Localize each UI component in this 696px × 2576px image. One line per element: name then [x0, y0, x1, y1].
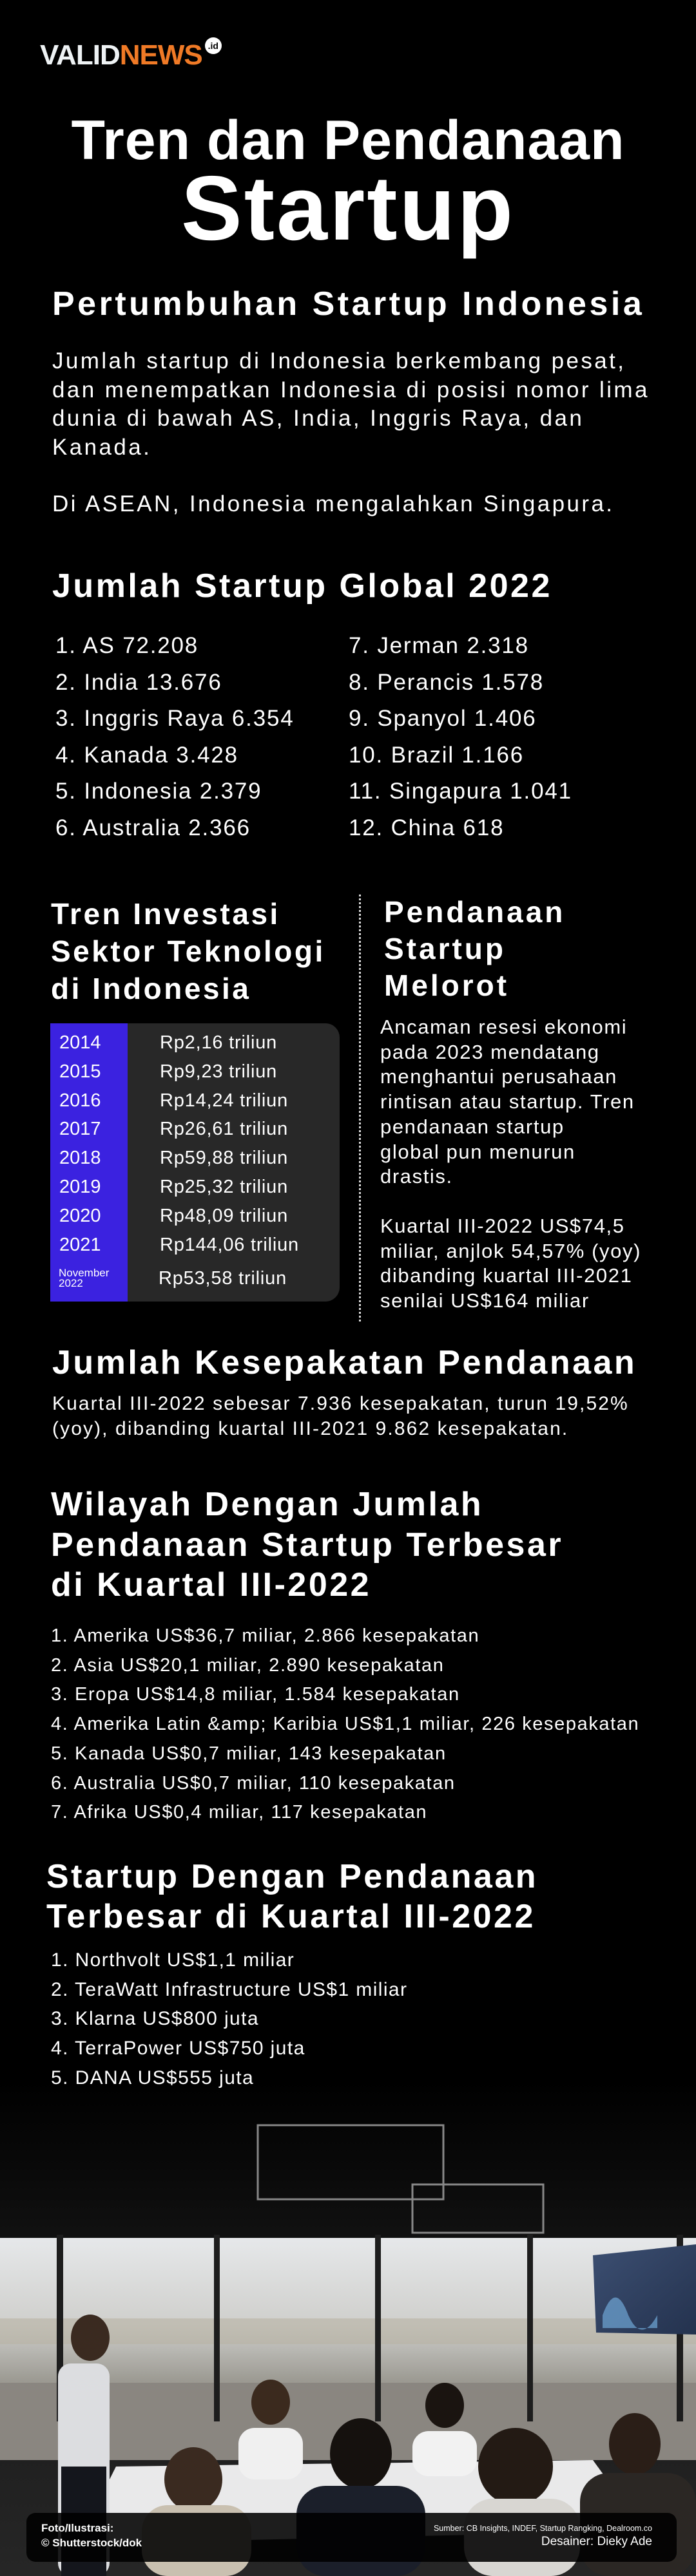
- table: investasi: 2015: [59, 1061, 101, 1082]
- text: kuartal figures: Kuartal III-2022 US$74,5: [380, 1215, 625, 1237]
- list: startup global: [55, 633, 572, 840]
- list: startup global: 10. Brazil 1.166: [349, 743, 524, 768]
- heading: Tren Investasi: [51, 897, 325, 1005]
- photo credit: [41, 2522, 142, 2549]
- values column: Rp25,32 triliun: [160, 1177, 288, 1197]
- list: startup global: 4. Kanada 3.428: [55, 743, 238, 768]
- text: pertumbuhan paragraph: dunia di bawah AS, India, Inggris Raya, dan: [52, 406, 584, 431]
- list: startup global: 1. AS 72.208: [55, 633, 198, 658]
- heading: Jumlah Startup Global 2022: Jumlah Startup Global 2022: [52, 567, 552, 605]
- title: Tren dan Pendanaan: [71, 109, 625, 171]
- heading: Startup Dengan Pendanaan: Startup Dengan Pendanaan: [46, 1858, 538, 1895]
- heading: Pertumbuhan Startup Indonesia: Pertumbuhan Startup Indonesia: [52, 285, 644, 323]
- text: pertumbuhan paragraph: dan menempatkan Indonesia di posisi nomor lima: [52, 377, 650, 402]
- title: Startup: [181, 157, 515, 260]
- title: [71, 109, 625, 260]
- text: kesepakatan: [52, 1393, 629, 1439]
- text: kuartal figures: miliar, anjlok 54,57% (yoy): [380, 1240, 641, 1262]
- source and designer: Sumber: CB Insights, INDEF, Startup Rangking, Dealroom.co: [434, 2524, 652, 2533]
- heading: Wilayah: di Kuartal III-2022: [51, 1566, 371, 1604]
- list: startup global: 3. Inggris Raya 6.354: [55, 706, 295, 731]
- text: melorot paragraph: Ancaman resesi ekonomi: [380, 1016, 627, 1038]
- values column: Rp9,23 triliun: [160, 1061, 277, 1082]
- heading: Pendanaan Startup Melorot: Startup: [384, 932, 506, 965]
- tv: [593, 2244, 696, 2334]
- list: startup global: 7. Jerman 2.318: [349, 633, 529, 658]
- list: startup global: 11. Singapura 1.041: [349, 779, 572, 804]
- values column: Rp14,24 triliun: [160, 1090, 288, 1111]
- list: startup global: 8. Perancis 1.578: [349, 670, 544, 695]
- text: ASEAN: Di ASEAN, Indonesia mengalahkan Singapura.: [52, 491, 614, 516]
- table: investasi: 2017: [59, 1119, 101, 1139]
- list: wilayah: 4. Amerika Latin &amp; Karibia US$1,1 miliar, 226 kesepakatan: [51, 1714, 639, 1734]
- table: investasi: 2016: [59, 1090, 101, 1111]
- list: wilayah: 3. Eropa US$14,8 miliar, 1.584 kesepakatan: [51, 1684, 460, 1705]
- heading: Wilayah: Pendanaan Startup Terbesar: [51, 1526, 563, 1564]
- text: kuartal figures: dibanding kuartal III-2021: [380, 1264, 632, 1287]
- text: melorot paragraph: rintisan atau startup. Tren: [380, 1090, 635, 1113]
- list: startup global: 2. India 13.676: [55, 670, 222, 695]
- list: wilayah: [51, 1625, 639, 1823]
- heading: Tren Investasi: Sektor Teknologi: [51, 934, 325, 968]
- values column: Rp144,06 triliun: [160, 1235, 299, 1255]
- logo: VALIDNEWS: [40, 39, 202, 71]
- heading: Startup Dengan Pendanaan: Terbesar di Kuartal III-2022: [46, 1898, 536, 1935]
- list: startup terbesar: 2. TeraWatt Infrastructure US$1 miliar: [51, 1979, 407, 2000]
- list: wilayah: 7. Afrika US$0,4 miliar, 117 kesepakatan: [51, 1802, 427, 1823]
- text: pertumbuhan paragraph: [52, 348, 650, 460]
- text: melorot paragraph: drastis.: [380, 1165, 453, 1188]
- heading: Pendanaan Startup Melorot: Pendanaan: [384, 895, 565, 929]
- text: melorot paragraph: [380, 1016, 635, 1188]
- text: melorot paragraph: global pun menurun: [380, 1141, 575, 1163]
- text: melorot paragraph: pada 2023 mendatang: [380, 1041, 600, 1063]
- people: [58, 2315, 696, 2576]
- photo: meeting room: [0, 2124, 696, 2576]
- list: wilayah: 2. Asia US$20,1 miliar, 2.890 kesepakatan: [51, 1655, 445, 1676]
- table: investasi: Rp53,58 triliun: [159, 1268, 287, 1289]
- year column: [50, 1023, 128, 1302]
- text: pertumbuhan paragraph: Kanada.: [52, 434, 151, 460]
- photo credit: Foto/Ilustrasi:: [41, 2522, 113, 2534]
- table: investasi: 2018: [59, 1148, 101, 1168]
- text: melorot paragraph: menghantui perusahaan: [380, 1065, 617, 1088]
- list: startup terbesar: 3. Klarna US$800 juta: [51, 2008, 259, 2029]
- list: startup terbesar: 5. DANA US$555 juta: [51, 2067, 254, 2088]
- heading: Wilayah: Wilayah Dengan Jumlah: [51, 1486, 483, 1523]
- values column: [160, 1032, 299, 1255]
- list: startup terbesar: [51, 1949, 407, 2088]
- values column: Rp48,09 triliun: [160, 1206, 288, 1226]
- table: investasi: 2020: [59, 1206, 101, 1226]
- heading: Startup Dengan Pendanaan: [46, 1858, 538, 1935]
- values column: Rp2,16 triliun: [160, 1032, 277, 1053]
- window band: [0, 2238, 696, 2383]
- table: [77, 2460, 644, 2544]
- table: investasi: [50, 1023, 340, 1302]
- table: investasi: 2022: [59, 1277, 83, 1289]
- lamps: [258, 2125, 543, 2233]
- table: investasi: November: [59, 1267, 109, 1279]
- list: wilayah: 6. Australia US$0,7 miliar, 110 kesepakatan: [51, 1773, 456, 1794]
- photo credit: © Shutterstock/dok: [41, 2537, 142, 2549]
- text: kesepakatan: (yoy), dibanding kuartal III-2021 9.862 kesepakatan.: [52, 1418, 568, 1439]
- heading: Wilayah: [51, 1486, 563, 1604]
- list: wilayah: 1. Amerika US$36,7 miliar, 2.866 kesepakatan: [51, 1625, 479, 1646]
- heading: Tren Investasi: Tren Investasi: [51, 897, 280, 931]
- list: startup terbesar: 1. Northvolt US$1,1 miliar: [51, 1949, 295, 1971]
- values column: Rp26,61 triliun: [160, 1119, 288, 1139]
- source and designer: [434, 2524, 652, 2548]
- table: investasi: 2014: [59, 1032, 101, 1053]
- list: startup global: 6. Australia 2.366: [55, 815, 251, 840]
- footer: credits: [26, 2513, 677, 2562]
- source and designer: Desainer: Dieky Ade: [541, 2535, 652, 2548]
- list: startup global: 12. China 618: [349, 815, 504, 840]
- heading: Pendanaan Startup Melorot: Melorot: [384, 969, 509, 1002]
- text: kesepakatan: Kuartal III-2022 sebesar 7.936 kesepakatan, turun 19,52%: [52, 1393, 629, 1414]
- logo: .id: [208, 41, 218, 51]
- heading: Jumlah Kesepakatan Pendanaan: Jumlah Kesepakatan Pendanaan: [52, 1344, 637, 1381]
- table: investasi: 2021: [59, 1235, 101, 1255]
- list: startup global: 9. Spanyol 1.406: [349, 706, 537, 731]
- text: melorot paragraph: pendanaan startup: [380, 1115, 565, 1138]
- table: investasi: 2019: [59, 1177, 101, 1197]
- text: pertumbuhan paragraph: Jumlah startup di Indonesia berkembang pesat,: [52, 348, 626, 374]
- text: kuartal figures: senilai US$164 miliar: [380, 1289, 590, 1312]
- list: wilayah: 5. Kanada US$0,7 miliar, 143 kesepakatan: [51, 1743, 447, 1764]
- text: kuartal figures: [380, 1215, 641, 1312]
- heading: Pendanaan Startup Melorot: [384, 895, 565, 1002]
- list: startup global: 5. Indonesia 2.379: [55, 779, 262, 804]
- values column: Rp59,88 triliun: [160, 1148, 288, 1168]
- list: startup terbesar: 4. TerraPower US$750 juta: [51, 2038, 305, 2059]
- heading: Tren Investasi: di Indonesia: [51, 972, 251, 1005]
